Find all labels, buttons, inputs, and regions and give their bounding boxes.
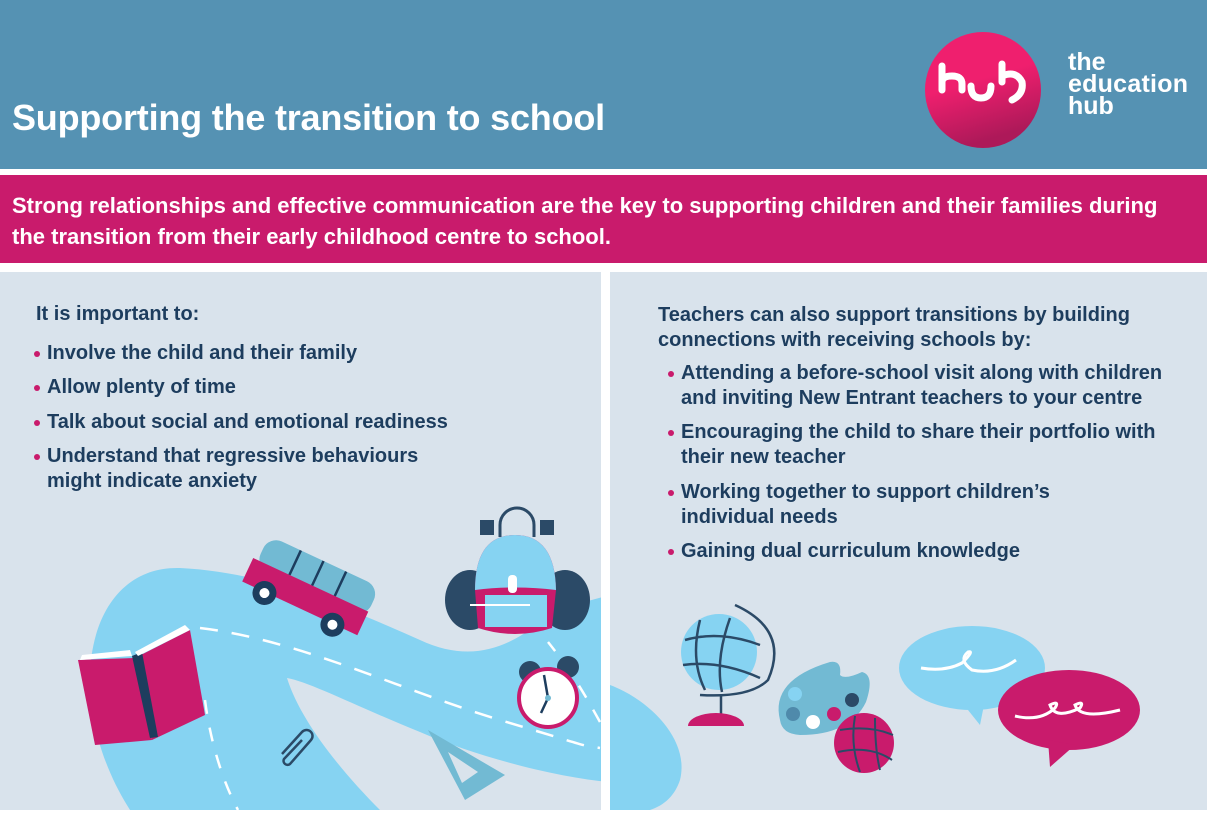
intro band: the transition from their early childhood centre to school. — [12, 224, 611, 249]
icon: set square — [428, 730, 505, 800]
text block: right list: Teachers can also support transitions by building — [658, 304, 1130, 326]
text block: left list: It is important to: — [36, 303, 199, 325]
text block: right list: Gaining dual curriculum knowledge — [681, 540, 1020, 562]
text block: right list: connections with receiving schools by: — [658, 329, 1031, 351]
logo: education — [1068, 70, 1188, 98]
icon: book — [78, 625, 205, 745]
icon: paper clip — [282, 730, 313, 765]
logo: hub — [1068, 92, 1114, 120]
text block: right list: Encouraging the child to share their portfolio with — [681, 421, 1155, 443]
text block: right list: individual needs — [681, 506, 838, 528]
logo: the — [1068, 48, 1106, 76]
icon: speech bubble blue — [899, 626, 1045, 725]
illustration: road and school items — [78, 506, 1140, 810]
text block: right list: and inviting New Entrant teachers to your centre — [681, 387, 1142, 409]
icon: alarm clock — [519, 656, 579, 727]
header bar — [0, 0, 1207, 169]
icon: globe — [681, 605, 774, 740]
icon: bus — [237, 534, 380, 647]
icon: basketball — [834, 713, 894, 773]
logo — [925, 32, 1188, 148]
text block: right list — [658, 304, 1162, 562]
text block: left list — [34, 303, 448, 492]
text block: right list: Attending a before-school visit along with children — [681, 362, 1162, 384]
text block: left list: Understand that regressive behaviours — [47, 445, 418, 467]
panel: left — [0, 272, 601, 810]
text block: left list: might indicate anxiety — [47, 470, 257, 492]
panel: right — [610, 272, 1207, 810]
text block: left list: Talk about social and emotional readiness — [47, 411, 448, 433]
text block: right list: their new teacher — [681, 446, 846, 468]
icon: backpack — [445, 508, 590, 634]
text block: left list: Allow plenty of time — [47, 376, 236, 398]
intro band — [0, 175, 1207, 263]
intro band: Strong relationships and effective communication are the key to supporting children and their families during — [12, 193, 1157, 218]
text block: left list: Involve the child and their family — [47, 342, 357, 364]
title: Supporting the transition to school — [12, 97, 605, 138]
icon: paint palette — [779, 662, 870, 735]
icon: speech bubble pink — [998, 670, 1140, 767]
text block: right list: Working together to support children’s — [681, 481, 1050, 503]
